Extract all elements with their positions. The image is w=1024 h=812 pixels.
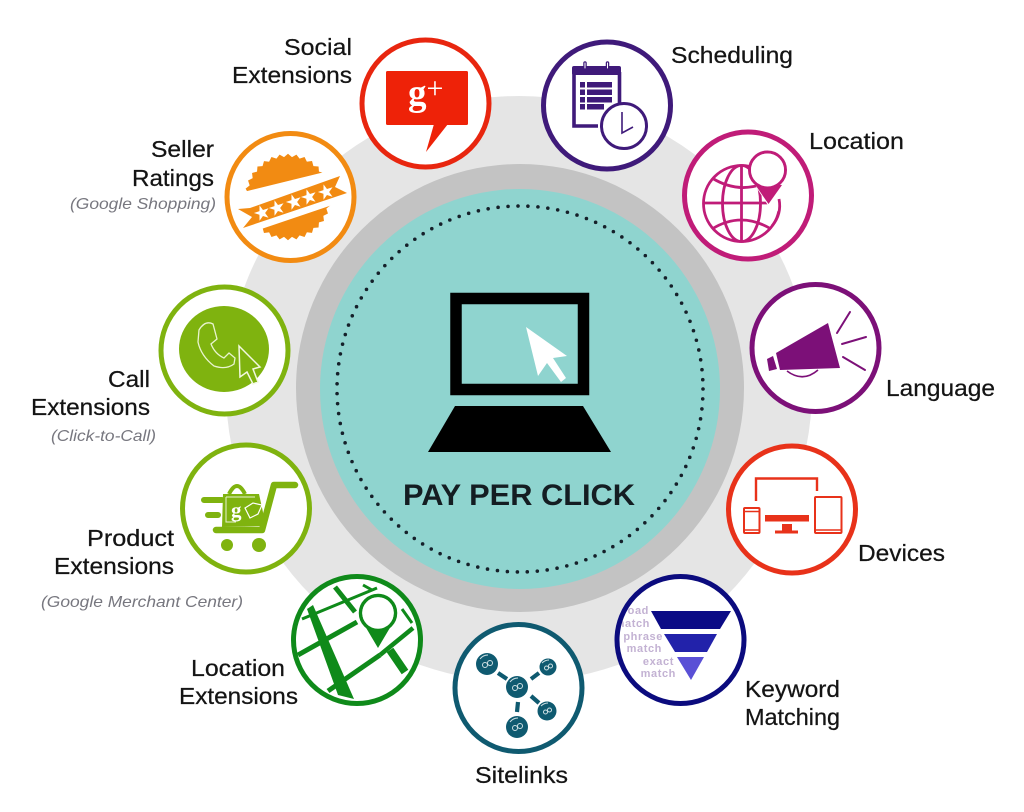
panel: social extensions [232, 34, 489, 167]
label: scheduling: Scheduling [671, 42, 793, 68]
icon: google plus speech bubble: + [426, 72, 443, 105]
label: social extensions [232, 34, 352, 88]
label: call extensions: Extensions [31, 394, 150, 420]
panel: call extensions [31, 287, 288, 445]
label: location extensions [179, 655, 298, 709]
label: call extensions [31, 366, 156, 445]
panel: location extensions [179, 576, 420, 709]
panel: language [752, 284, 995, 412]
label: location extensions: Extensions [179, 683, 298, 709]
label: language: Language [886, 375, 995, 401]
label: keyword matching: Matching [745, 704, 840, 730]
icon: megaphone [752, 284, 879, 412]
icon: linked nodes [455, 624, 582, 752]
panel: product extensions [41, 445, 310, 611]
icon: keyword funnel: match [641, 668, 676, 680]
panel: keyword matching [615, 576, 840, 730]
label: location extensions: Location [191, 655, 285, 681]
icon: google plus speech bubble [362, 40, 489, 167]
label: call extensions: Call [108, 366, 150, 392]
icon: keyword funnel: match [627, 643, 662, 655]
label: product extensions: Extensions [54, 553, 174, 579]
icon: keyword funnel: exact [643, 656, 674, 668]
icon: phone and cursor [161, 287, 288, 414]
label: keyword matching [745, 676, 840, 730]
label: devices: Devices [858, 540, 945, 566]
icon: keyword funnel [615, 576, 744, 704]
icon: globe with pin [684, 132, 812, 259]
icon: street map with pin [294, 576, 420, 704]
label: seller ratings [70, 136, 216, 213]
dotted inner circle [337, 206, 703, 572]
panel: devices [728, 446, 945, 573]
icon: shopping cart: g [231, 498, 242, 522]
icon: google plus speech bubble: g [408, 73, 426, 114]
icon: calendar and clock [544, 42, 670, 169]
label: product extensions: Product [87, 525, 175, 551]
panel: sitelinks [455, 624, 582, 788]
label: call extensions: (Click-to-Call) [51, 428, 156, 445]
label: seller ratings: Seller [151, 136, 214, 162]
icon: shopping cart [182, 445, 310, 572]
icon: monitor phone and tablet [728, 446, 856, 573]
label: product extensions [41, 525, 243, 611]
label: product extensions: (Google Merchant Center) [41, 594, 243, 611]
panel: seller ratings [70, 134, 354, 260]
icon: keyword funnel: broad [615, 605, 649, 617]
label: seller ratings: Ratings [132, 165, 214, 191]
icon: keyword funnel: phrase [623, 631, 663, 643]
label: social extensions: Extensions [232, 62, 352, 88]
title: pay per click: PAY PER CLICK [403, 479, 635, 512]
panel: location [684, 128, 904, 259]
middle dark grey ring [296, 164, 744, 612]
icon: star rating badge [227, 134, 354, 260]
outer light grey ring [226, 96, 812, 682]
label: keyword matching: Keyword [745, 676, 840, 702]
icon: laptop with cursor [428, 298, 611, 452]
central teal disc [320, 189, 720, 589]
label: social extensions: Social [284, 34, 352, 60]
panel: scheduling [544, 42, 793, 169]
label: seller ratings: (Google Shopping) [70, 196, 216, 213]
label: location: Location [809, 128, 904, 154]
label: sitelinks: Sitelinks [475, 762, 568, 788]
icon: keyword funnel: match [615, 618, 650, 630]
